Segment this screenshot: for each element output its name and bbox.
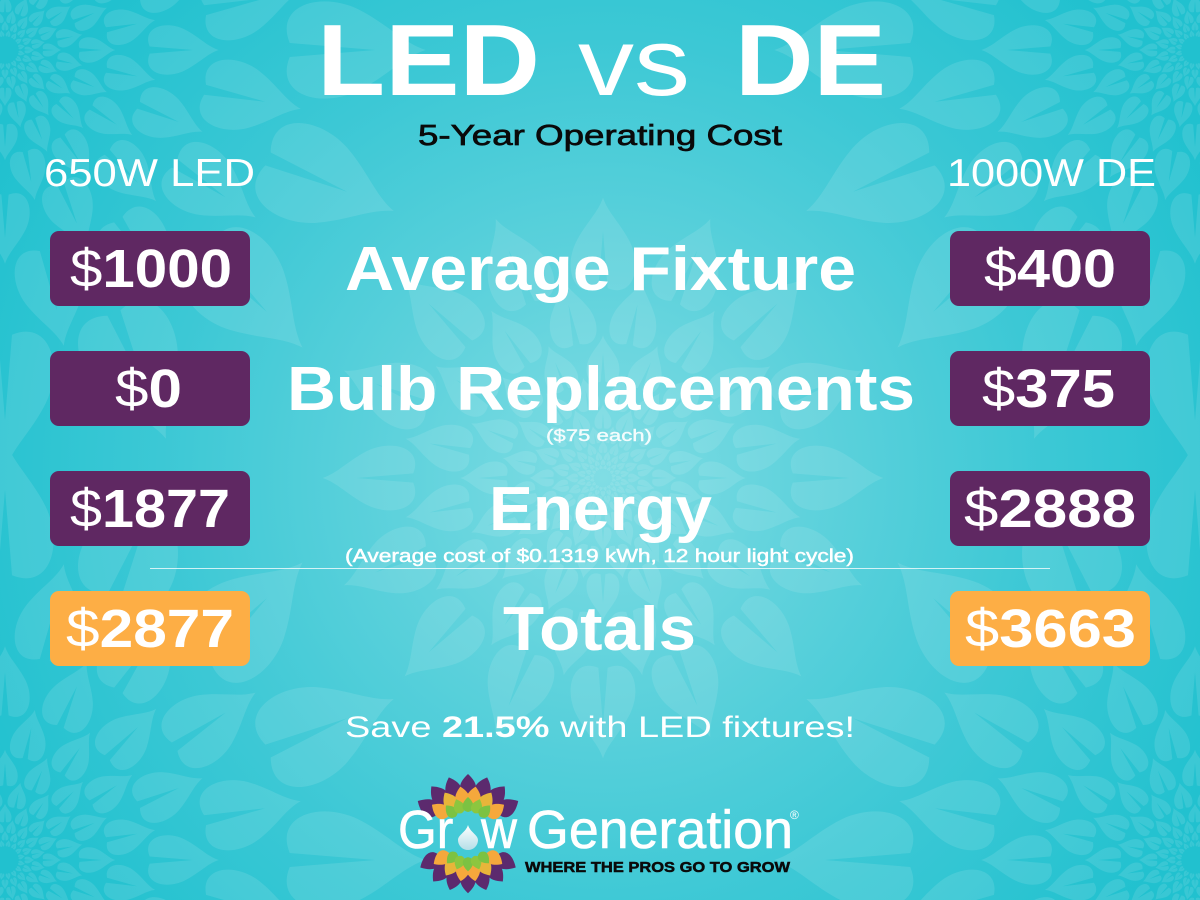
DE energy cost: $2888 [964, 479, 1136, 539]
logo wordmark [398, 800, 799, 860]
energy label: Energy [489, 475, 713, 544]
row: totals [50, 591, 1150, 666]
LED energy cost: $1877 [70, 479, 230, 539]
logo wordmark: Generation [527, 800, 793, 860]
DE bulb cost [950, 351, 1150, 426]
icon: leaf wreath [413, 774, 523, 893]
LED fixture cost [50, 231, 250, 306]
DE total: $3663 [965, 599, 1136, 659]
title: vs [578, 9, 690, 116]
bulb label: Bulb Replacements [287, 355, 915, 424]
LED bulb cost [50, 351, 250, 426]
LED fixture cost: $1000 [70, 239, 232, 299]
column heading: 650W LED: 650W LED [44, 152, 255, 195]
subtitle: 5-Year Operating Cost [418, 120, 782, 152]
row: bulb replacements [50, 351, 1150, 445]
totals label: Totals [503, 595, 696, 664]
logo wordmark: Grow [398, 800, 518, 860]
LED total [50, 591, 250, 666]
logo wordmark: ® [790, 808, 799, 822]
DE energy cost [950, 471, 1150, 546]
DE bulb cost: $375 [982, 359, 1115, 419]
logo tagline: WHERE THE PROS GO TO GROW [525, 859, 791, 876]
title: LED [317, 5, 540, 117]
icon: water drop [458, 825, 478, 850]
divider line [150, 568, 1050, 569]
DE fixture cost: $400 [984, 239, 1116, 299]
LED energy cost [50, 471, 250, 546]
savings callout: Save 21.5% with LED fixtures! [345, 711, 855, 744]
row: energy [50, 471, 1150, 566]
DE fixture cost [950, 231, 1150, 306]
logo: GrowGeneration [398, 774, 799, 893]
title: DE [735, 5, 886, 117]
row: average fixture [50, 231, 1150, 306]
title [317, 5, 886, 117]
fixture label: Average Fixture [345, 235, 856, 304]
energy note: (Average cost of $0.1319 kWh, 12 hour light cycle) [345, 546, 854, 566]
column heading: 1000W DE: 1000W DE [947, 152, 1156, 195]
LED total: $2877 [66, 599, 234, 659]
DE total [950, 591, 1150, 666]
LED bulb cost: $0 [115, 359, 182, 419]
bulb note: ($75 each) [546, 426, 652, 445]
